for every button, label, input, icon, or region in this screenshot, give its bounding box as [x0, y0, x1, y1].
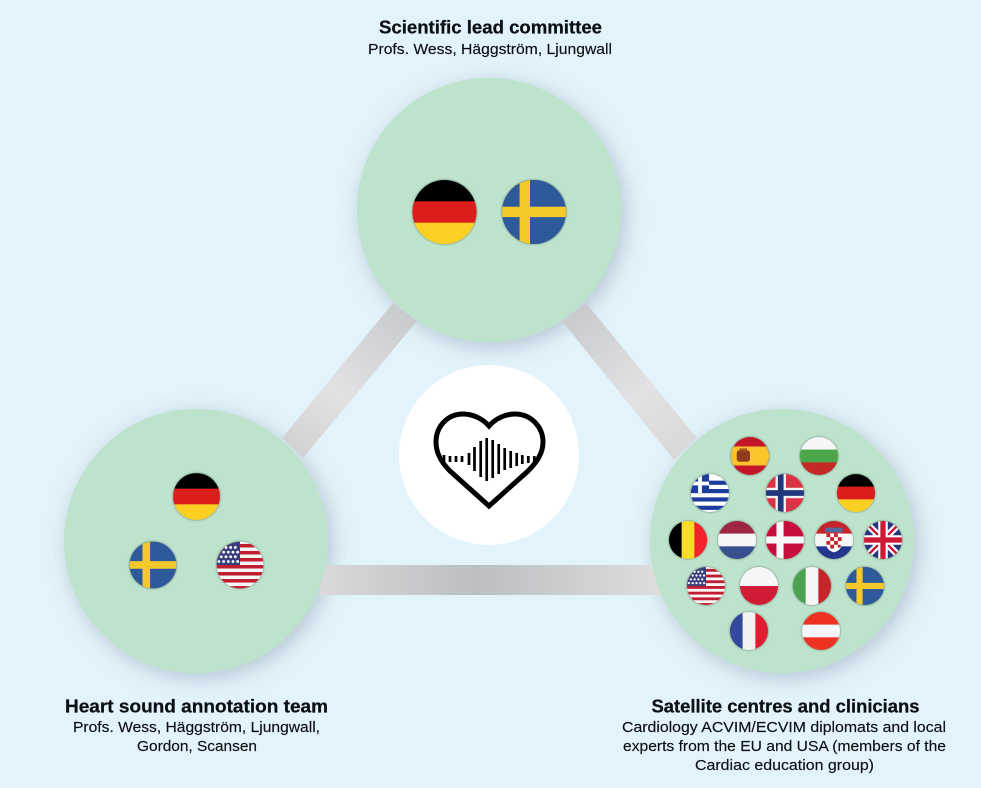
heading: scientific lead committee: Scientific lead committee [379, 18, 602, 38]
heading: scientific lead committee [368, 18, 612, 58]
flags: Germany and Sweden [412, 180, 566, 244]
subtext: satellite centre description [622, 720, 946, 774]
panel: heart sound annotation team circle [64, 409, 328, 673]
connector: left to right [320, 565, 665, 595]
heading: satellite centres and clinicians [622, 696, 946, 774]
panel: satellite centres circle [650, 409, 914, 673]
flags: Germany, Sweden and USA [130, 473, 263, 590]
subtext: satellite centre description: Cardiac education group) [695, 758, 874, 774]
heading: satellite centres and clinicians: Satellite centres and clinicians [652, 696, 920, 716]
subtext: annotation team members: Gordon, Scansen [137, 739, 257, 755]
icon: sound waveform [444, 438, 534, 481]
panel: scientific lead committee circle [357, 78, 621, 342]
subtext: committee members: Profs. Wess, Häggström, Ljungwall [368, 42, 612, 58]
connector: top to right [562, 303, 697, 460]
subtext: annotation team members: Profs. Wess, Häggström, Ljungwall, [73, 720, 320, 736]
subtext: satellite centre description: experts from the EU and USA (members of the [623, 739, 946, 755]
subtext: annotation team members [73, 720, 320, 755]
heading: heart sound annotation team [65, 696, 328, 755]
connector: top to left [282, 303, 417, 458]
subtext: satellite centre description: Cardiology ACVIM/ECVIM diplomats and local [622, 720, 946, 736]
flags: sixteen participating countries [669, 437, 902, 650]
icon: heart outline [436, 414, 543, 506]
centre white circle with heart sound icon [399, 365, 579, 545]
heading: heart sound annotation team: Heart sound annotation team [65, 696, 328, 716]
